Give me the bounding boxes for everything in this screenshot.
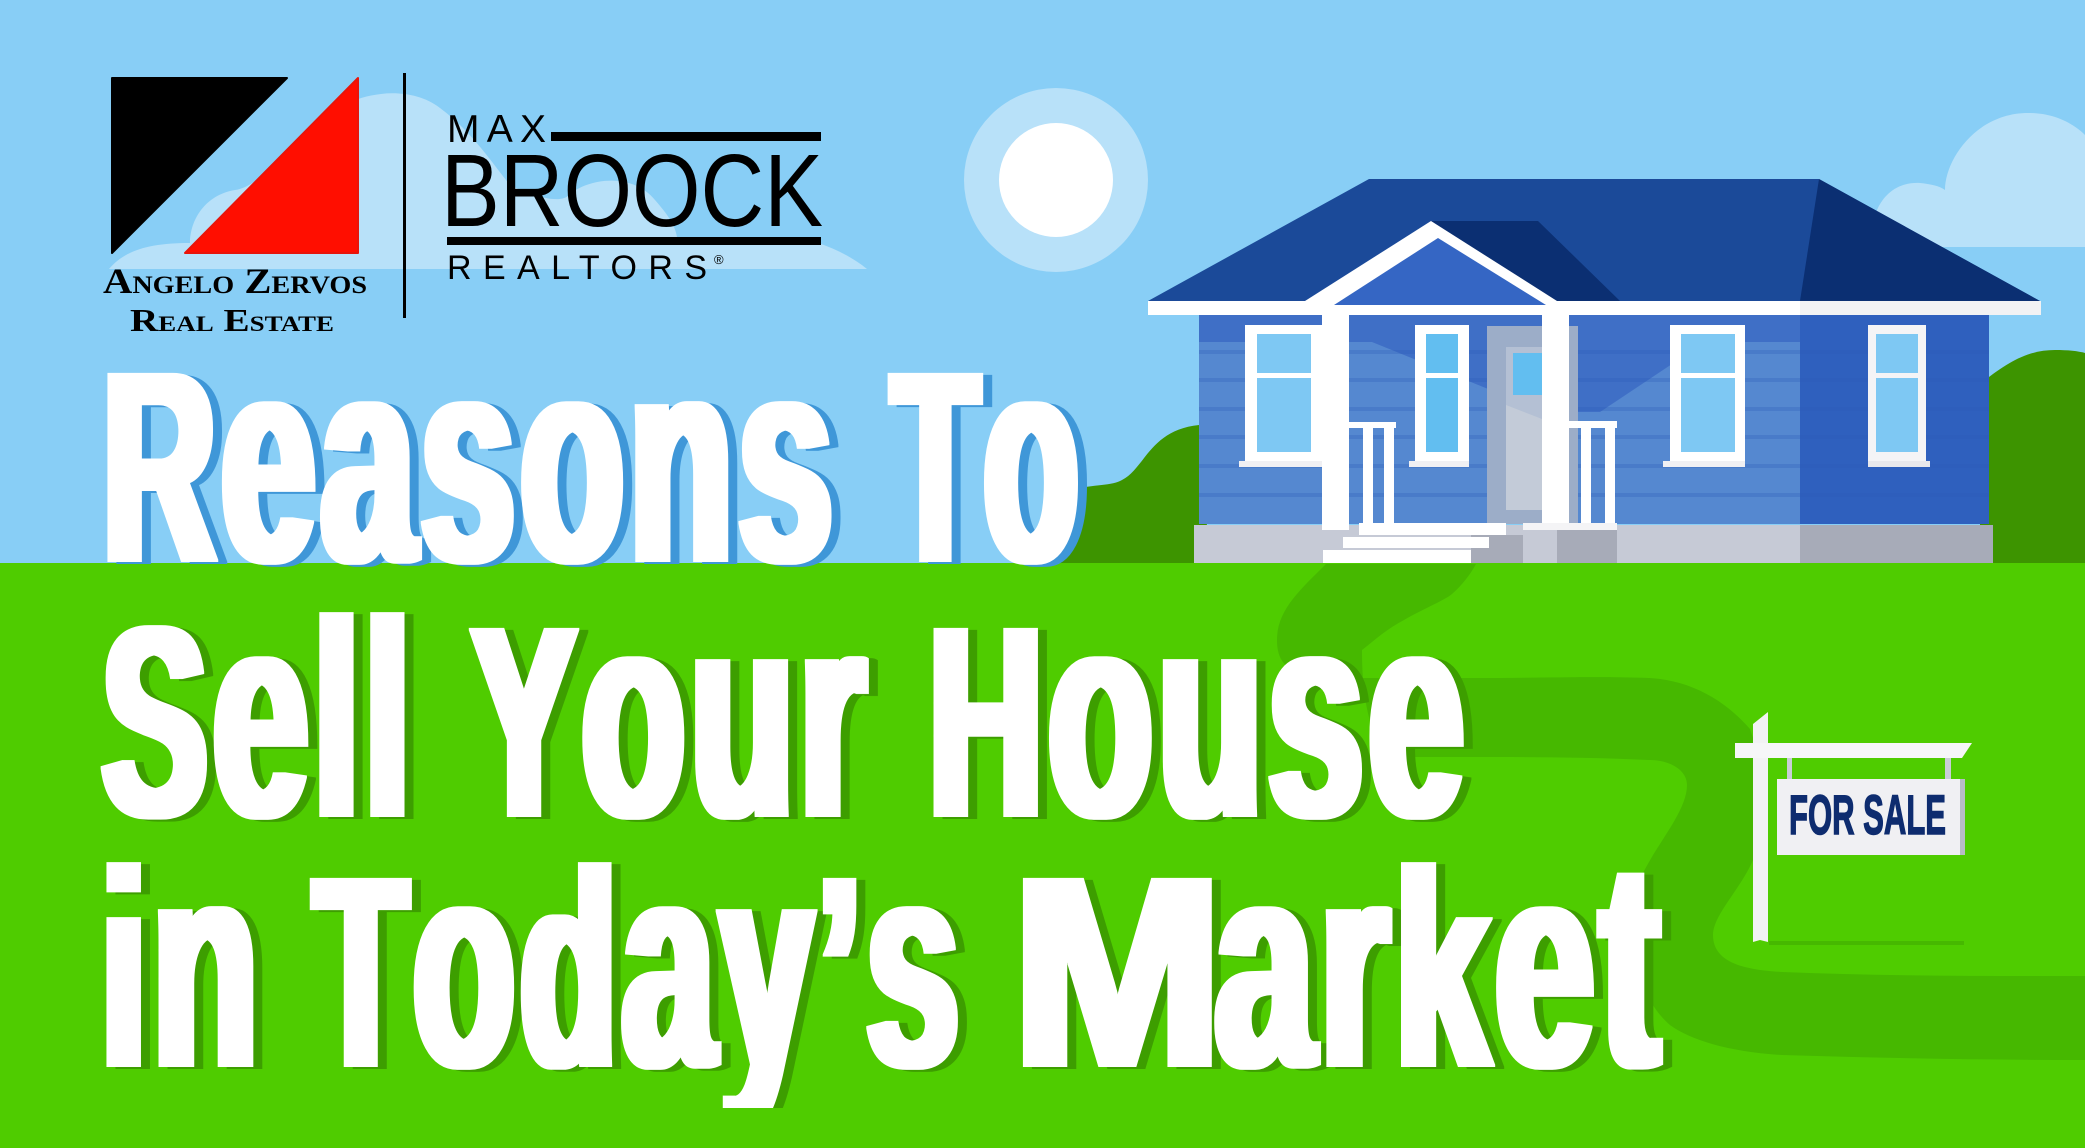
roof [1148, 179, 2040, 301]
winding garden path [1277, 564, 2085, 1060]
gable shadow [1431, 221, 1620, 301]
sky background [0, 0, 2085, 564]
gable frame [1305, 221, 1557, 315]
siding lines [1199, 350, 1989, 497]
logo tagline: Real Estate [130, 302, 334, 338]
logo: Max Brook Realtors [441, 108, 823, 287]
window 1 [1239, 325, 1322, 467]
title line 1: Reasons To: Reasons [103, 294, 838, 624]
sign shadow [1769, 941, 1964, 945]
grass lawn [0, 563, 2085, 1148]
sign text: FOR SALE [1789, 783, 1946, 846]
window 3 [1663, 325, 1745, 467]
bush right [1980, 350, 2085, 564]
bottom rule [447, 237, 821, 245]
eave band [1148, 301, 1800, 315]
steps [1323, 523, 1506, 563]
sign hangers [1787, 758, 1951, 779]
eave band shaded [1800, 301, 2041, 315]
title line 3: in Today's Market: in [101, 800, 264, 1129]
porch columns [1322, 315, 1569, 530]
house wall [1199, 315, 1800, 524]
sign board [1777, 779, 1965, 855]
window 4 [1868, 325, 1930, 467]
for sale sign [1735, 712, 1972, 945]
bush left [1060, 425, 1210, 564]
logo name: Angelo Zervos [103, 261, 367, 301]
foundation shaded [1800, 525, 1993, 563]
foundation [1194, 525, 1800, 563]
top rule [551, 132, 821, 141]
window 2 [1409, 325, 1469, 467]
sign post [1753, 712, 1768, 942]
logo divider [403, 73, 406, 318]
title line 2: Sell Your House: House [929, 550, 1469, 880]
porch base side [1557, 530, 1617, 563]
title line 3: in Today's Market: arket [1215, 798, 1665, 1129]
gable fill [1334, 238, 1546, 305]
REALTORS text: REALTORS [447, 249, 707, 287]
porch top [1523, 523, 1617, 530]
wall shaded side [1800, 315, 1989, 524]
title line 2: Sell Your House: Sell [102, 551, 416, 880]
title line 3: in Today's Market: M [1012, 820, 1232, 1124]
cloud right [1877, 113, 2085, 247]
MAX text: MAX [447, 108, 546, 151]
title line 1: Reasons To: To [892, 294, 1083, 624]
house [1148, 179, 2041, 563]
sign crossbar [1735, 743, 1972, 758]
roof shaded side [1800, 179, 2040, 301]
logo: Angelo Zervos Real Estate [103, 78, 367, 338]
logo red triangle [185, 78, 358, 253]
left railing [1348, 422, 1396, 524]
door [1487, 326, 1578, 524]
BROOCK text: BROOCK [441, 133, 823, 248]
registered mark: ® [714, 252, 724, 267]
title line 3: in Today's Market: Today’s [314, 799, 964, 1129]
title line 3: in Today's Market [106, 862, 1672, 1108]
title line 2: Sell Your House: Your [472, 549, 871, 879]
wall light beam [1199, 342, 1800, 524]
cloud behind logo [109, 93, 867, 269]
icon: sun [964, 88, 1148, 272]
stair shadow [1471, 535, 1523, 563]
logo black triangle [112, 78, 287, 253]
title line 2: Sell Your House [102, 549, 1469, 880]
right railing [1568, 421, 1617, 524]
